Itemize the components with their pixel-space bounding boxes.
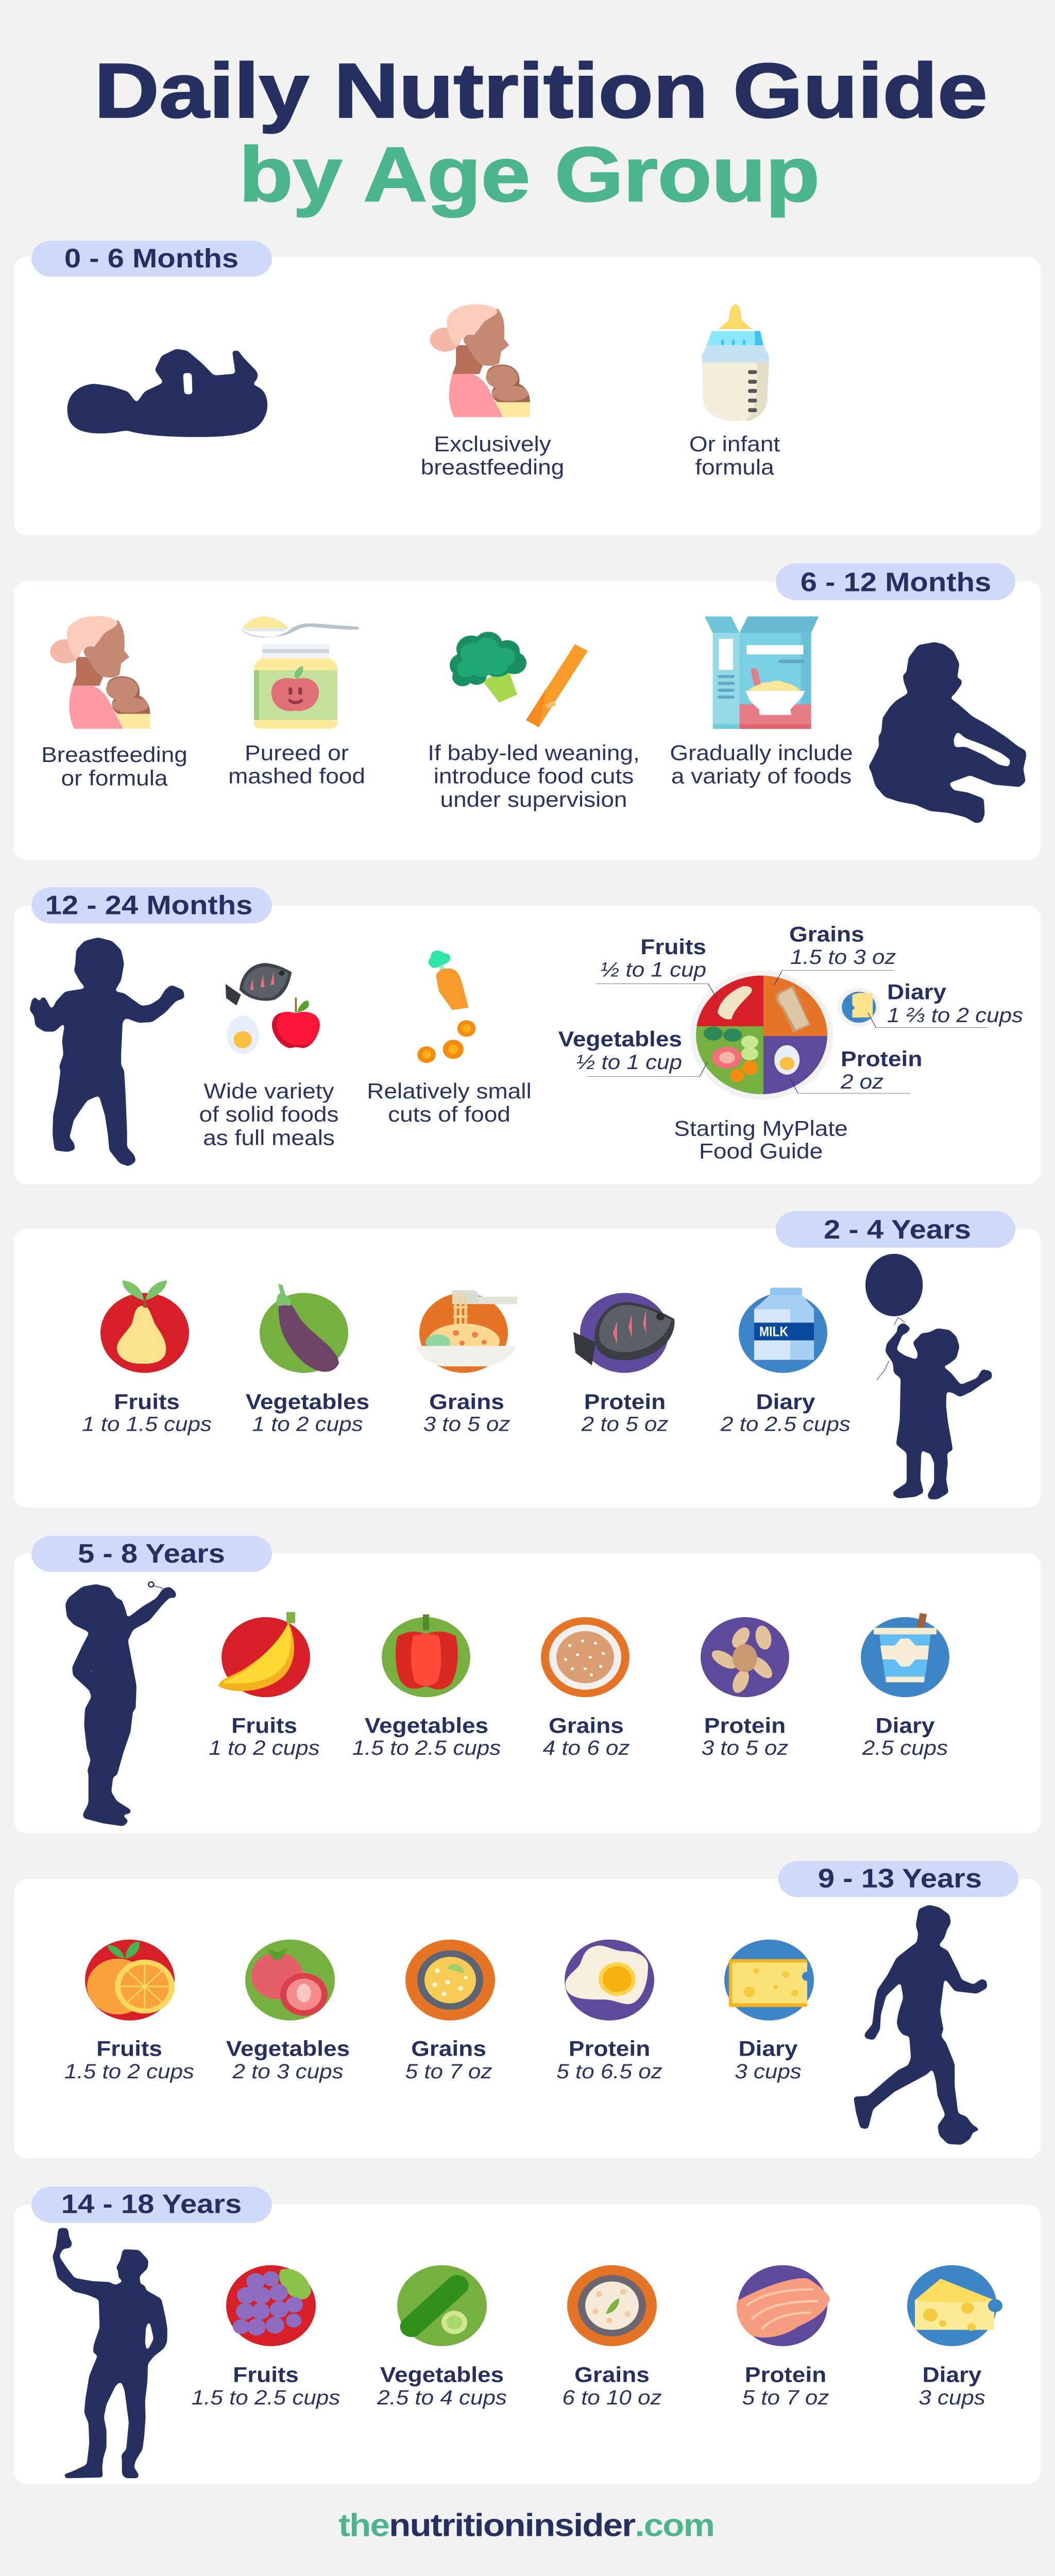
- icon: cereal box: [705, 616, 819, 729]
- text: diary 2.5 cups: Diary: [875, 1714, 935, 1738]
- text: protein 3 to 5 oz: Protein: [704, 1714, 786, 1738]
- text: gradually include a variety of foods: a variaty of foods: [671, 765, 852, 788]
- text: vegetables 1.5 to 2.5 cups: [352, 1714, 501, 1759]
- callout: grains: Grains: [789, 923, 864, 946]
- callout: diary: 1 ⅔ to 2 cups: [887, 1004, 1023, 1026]
- icon: breastfeeding mother: [50, 616, 150, 729]
- icon: grapes: [226, 2265, 316, 2346]
- text: breastfeeding or formula: or formula: [61, 766, 168, 790]
- age label: 0-6 months: [31, 241, 272, 277]
- age label: 6-12 months: 6 - 12 Months: [801, 567, 991, 597]
- text: protein 2 to 5 oz: [581, 1390, 668, 1435]
- text: protein 5 to 7 oz: 5 to 7 oz: [742, 2386, 829, 2409]
- silhouette: lying baby: [67, 349, 267, 437]
- icon: cheese wedge: [907, 2265, 1002, 2346]
- panel: 9-13 years: [14, 1861, 1041, 2158]
- age label: 9-13 years: 9 - 13 Years: [818, 1863, 982, 1893]
- panel: 6-12 months: [14, 564, 1041, 860]
- footer: website: thenutritioninsider.com: [338, 2506, 715, 2543]
- icon: cucumber: [395, 2265, 487, 2346]
- panel: 0-6 months: [14, 241, 1041, 535]
- silhouette: boy with soccer ball: [854, 1905, 988, 2145]
- text: vegetables 2 to 3 cups: 2 to 3 cups: [232, 2060, 344, 2082]
- text: fruits 1 to 1.5 cups: [82, 1390, 212, 1435]
- text: fruits 1 to 2 cups: Fruits: [231, 1714, 297, 1738]
- icon: diary cheese: [837, 988, 880, 1027]
- icon: fish: [573, 1293, 675, 1373]
- callout: fruits: [596, 935, 717, 998]
- callout: protein: 2 oz: [840, 1070, 883, 1093]
- panel: 2-4 years: [14, 1211, 1041, 1508]
- text: diary 3 cups: 3 cups: [735, 2060, 802, 2082]
- text: diary 3 cups: [735, 2037, 802, 2082]
- text: fruits 1 to 2 cups: 1 to 2 cups: [209, 1736, 320, 1759]
- text: or infant formula: formula: [695, 455, 774, 480]
- silhouette: child with balloon: [865, 1254, 992, 1499]
- silhouette: sitting baby: [869, 642, 1026, 823]
- text: gradually include a variety of foods: Gradually include: [670, 741, 853, 765]
- text: protein 5 to 7 oz: [742, 2363, 829, 2409]
- text: exclusively breastfeeding: Exclusively: [434, 432, 551, 456]
- text: wide variety of solid foods: as full meals: [203, 1126, 335, 1150]
- title: Daily Nutrition Guide: [94, 47, 988, 134]
- icon: salmon: [737, 2265, 830, 2346]
- text: vegetables 2.5 to 4 cups: [377, 2363, 507, 2409]
- text: breastfeeding or formula: Breastfeeding: [41, 743, 188, 767]
- icon: broccoli and carrot stick: [450, 632, 588, 727]
- icon: baby food jar and spoon: [241, 617, 359, 729]
- icon: rice bowl: [405, 1940, 495, 2021]
- age label: 5-8 years: [31, 1536, 272, 1572]
- callout: fruits: Fruits: [640, 935, 706, 959]
- callout: protein: Protein: [841, 1047, 922, 1071]
- text: protein 5 to 7 oz: Protein: [745, 2363, 826, 2387]
- text: protein 5 to 6.5 oz: 5 to 6.5 oz: [556, 2060, 662, 2082]
- text: vegetables 2.5 to 4 cups: Vegetables: [380, 2363, 504, 2387]
- text: vegetables 1 to 2 cups: [246, 1390, 369, 1435]
- text: grains 6 to 10 oz: Grains: [574, 2363, 650, 2387]
- panel: 14-18 years: [14, 2187, 1041, 2484]
- text: relatively small cuts of food: cuts of food: [388, 1103, 511, 1127]
- callout: grains: 1.5 to 3 oz: [790, 945, 896, 969]
- icon: banana: [218, 1612, 310, 1697]
- text: protein 5 to 6.5 oz: [556, 2037, 662, 2082]
- icon: red pepper: [382, 1614, 470, 1697]
- silhouette: teen taking selfie: [53, 2228, 167, 2478]
- text: diary 2 to 2.5 cups: [720, 1390, 850, 1435]
- title: [94, 47, 988, 217]
- text: grains 3 to 5 oz: 3 to 5 oz: [423, 1413, 510, 1435]
- text: grains 4 to 6 oz: [543, 1714, 629, 1759]
- text: protein 2 to 5 oz: Protein: [584, 1390, 666, 1414]
- age label: 12-24 months: 12 - 24 Months: [45, 890, 252, 920]
- text: grains 6 to 10 oz: [562, 2363, 662, 2409]
- text: vegetables 2 to 3 cups: [226, 2037, 350, 2082]
- panel: 5-8 years: [14, 1536, 1041, 1833]
- text: grains 5 to 7 oz: Grains: [411, 2037, 486, 2061]
- text: vegetables 2 to 3 cups: Vegetables: [226, 2037, 350, 2061]
- age label: 14-18 years: 14 - 18 Years: [61, 2189, 242, 2219]
- text: grains 3 to 5 oz: Grains: [429, 1390, 504, 1414]
- callout: protein: [790, 1047, 922, 1093]
- icon: milk carton: MILK: [759, 1324, 788, 1340]
- text: fruits 1.5 to 2.5 cups: 1.5 to 2.5 cups: [192, 2386, 340, 2409]
- text: diary 2 to 2.5 cups: Diary: [756, 1390, 815, 1414]
- text: wide variety of solid foods: Wide variety: [203, 1079, 334, 1103]
- text: wide variety of solid foods: of solid foods: [199, 1103, 338, 1127]
- text: exclusively breastfeeding: breastfeeding: [421, 455, 564, 480]
- text: diary 3 cups: Diary: [922, 2363, 982, 2387]
- text: grains 3 to 5 oz: [423, 1390, 510, 1435]
- age label: 6-12 months: [776, 564, 1015, 600]
- icon: fish, egg and apple: [226, 963, 320, 1054]
- icon: peanuts: [701, 1617, 789, 1697]
- text: vegetables 2.5 to 4 cups: 2.5 to 4 cups: [377, 2386, 507, 2409]
- icon: pear: [100, 1280, 189, 1373]
- callout: vegetables: [558, 1027, 707, 1077]
- callout: diary: Diary: [887, 980, 947, 1004]
- text: grains 5 to 7 oz: [405, 2037, 492, 2082]
- text: vegetables 1 to 2 cups: Vegetables: [246, 1390, 369, 1414]
- icon: eggplant: [260, 1284, 348, 1373]
- text: fruits 1.5 to 2 cups: 1.5 to 2 cups: [64, 2060, 194, 2082]
- icon: cheese block: [724, 1940, 814, 2021]
- text: starting myplate food guide: Food Guide: [699, 1140, 823, 1163]
- age label: 2-4 years: 2 - 4 Years: [824, 1214, 971, 1244]
- icon: milk carton: [739, 1288, 827, 1373]
- text: protein 3 to 5 oz: 3 to 5 oz: [702, 1736, 788, 1759]
- text: baby-led weaning advice: If baby-led weaning,: [428, 741, 640, 765]
- icon: yogurt cup: [861, 1613, 949, 1697]
- text: diary 2.5 cups: [862, 1714, 948, 1759]
- title: by Age Group: [239, 131, 820, 217]
- age label: 0-6 months: 0 - 6 Months: [64, 243, 239, 274]
- text: vegetables 1 to 2 cups: 1 to 2 cups: [252, 1413, 363, 1435]
- panel: 12-24 months: [14, 887, 1041, 1184]
- age label: 2-4 years: [776, 1211, 1015, 1248]
- text: starting myplate food guide: Starting MyPlate: [674, 1116, 848, 1141]
- text: grains 4 to 6 oz: 4 to 6 oz: [543, 1736, 629, 1759]
- text: fruits 1 to 1.5 cups: Fruits: [114, 1390, 180, 1414]
- text: pureed or mashed food: mashed food: [228, 765, 365, 788]
- text: diary 2 to 2.5 cups: 2 to 2.5 cups: [720, 1413, 850, 1435]
- text: diary 2.5 cups: 2.5 cups: [862, 1736, 948, 1759]
- text: grains 4 to 6 oz: Grains: [549, 1714, 624, 1738]
- icon: risotto: [567, 2265, 657, 2346]
- callout: vegetables: ½ to 1 cup: [576, 1050, 682, 1074]
- text: pureed or mashed food: Pureed or: [245, 741, 349, 765]
- text: fruits 1.5 to 2 cups: Fruits: [96, 2037, 162, 2061]
- callout: fruits: ½ to 1 cup: [601, 958, 706, 981]
- icon: tomato: [245, 1940, 335, 2021]
- age label: 14-18 years: [31, 2187, 272, 2223]
- icon: grain bowl: [541, 1617, 629, 1697]
- text: grains 6 to 10 oz: 6 to 10 oz: [562, 2386, 662, 2409]
- text: fruits 1 to 2 cups: [209, 1714, 320, 1759]
- text: protein 3 to 5 oz: [702, 1714, 788, 1759]
- silhouette: child blowing bubbles: [65, 1582, 176, 1826]
- text: fruits 1.5 to 2.5 cups: Fruits: [233, 2363, 299, 2387]
- text: protein 2 to 5 oz: 2 to 5 oz: [581, 1413, 668, 1435]
- icon: baby bottle: [702, 304, 769, 421]
- icon: carrot and slices: [417, 951, 475, 1063]
- callout: vegetables: Vegetables: [558, 1027, 682, 1051]
- text: protein 5 to 6.5 oz: Protein: [569, 2037, 650, 2061]
- silhouette: standing toddler: [29, 937, 185, 1166]
- text: diary 3 cups: Diary: [738, 2037, 798, 2061]
- text: diary 3 cups: 3 cups: [918, 2386, 985, 2409]
- text: fruits 1.5 to 2 cups: [64, 2037, 194, 2082]
- text: diary 3 cups: [918, 2363, 985, 2409]
- text: fruits 1 to 1.5 cups: 1 to 1.5 cups: [82, 1413, 212, 1435]
- chart: MyPlate plate: [690, 971, 833, 1100]
- callout: grains: [774, 923, 896, 985]
- text: baby-led weaning advice: introduce food cuts: [434, 765, 634, 788]
- text: or infant formula: Or infant: [689, 432, 780, 456]
- age label: 9-13 years: [778, 1861, 1018, 1897]
- text: relatively small cuts of food: Relatively small: [367, 1079, 532, 1103]
- callout: diary: [868, 980, 1023, 1027]
- icon: fried egg: [565, 1940, 654, 2021]
- text: fruits 1.5 to 2.5 cups: [192, 2363, 340, 2409]
- icon: pasta bowl: [415, 1290, 517, 1373]
- icon: breastfeeding mother: [430, 304, 530, 417]
- text: grains 5 to 7 oz: 5 to 7 oz: [405, 2060, 492, 2082]
- text: vegetables 1.5 to 2.5 cups: Vegetables: [365, 1714, 488, 1738]
- text: vegetables 1.5 to 2.5 cups: 1.5 to 2.5 cups: [352, 1736, 501, 1759]
- age label: 5-8 years: 5 - 8 Years: [78, 1538, 225, 1569]
- icon: orange: [85, 1940, 175, 2021]
- text: baby-led weaning advice: under supervision: [440, 788, 627, 811]
